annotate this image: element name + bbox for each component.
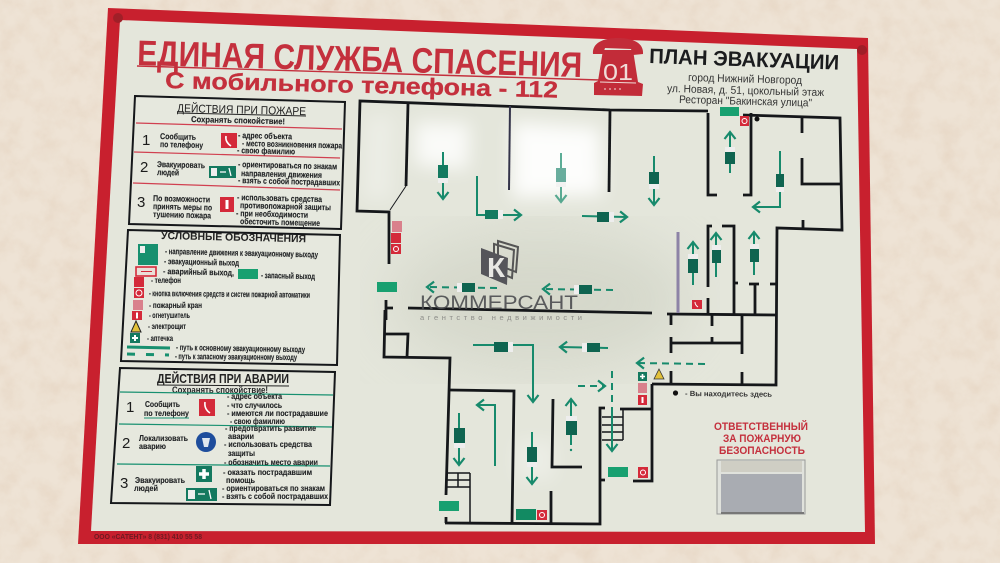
arrow: route 8	[473, 342, 533, 402]
row dividers	[133, 123, 342, 190]
legend: direction sign: - направление движения к эвакуационному выходу	[165, 246, 318, 259]
fire step 1: 1	[142, 132, 150, 149]
glare on the plate	[362, 115, 603, 480]
accident step 1: по телефону	[144, 408, 189, 418]
sign board	[78, 8, 875, 544]
fire safety responsible	[714, 420, 808, 457]
legend: alarm button	[134, 288, 310, 300]
legend: direction sign	[138, 244, 318, 265]
arrow: route 10	[566, 399, 577, 451]
plan heading	[649, 45, 840, 109]
plan heading: Ресторан "Бакинская улица"	[679, 94, 812, 109]
panel: legend	[121, 230, 340, 365]
accident step 2: аварии	[228, 431, 254, 441]
watermark name: КОММЕРСАНТ	[420, 293, 578, 314]
fire heading: Сохранять спокойствие!	[191, 114, 285, 126]
plan heading: ПЛАН ЭВАКУАЦИИ	[649, 45, 840, 75]
accident step 3: - оказать пострадавшим	[223, 467, 312, 477]
legend: extinguisher: - огнетушитель	[149, 310, 190, 320]
arrow: route 19	[725, 132, 735, 173]
warning triangle	[654, 369, 664, 379]
accident step 2: Локализовать	[139, 433, 188, 443]
legend: emergency and spare exit	[136, 266, 316, 281]
watermark caption: агентство недвижимости	[420, 313, 582, 322]
arrow: route 18	[750, 232, 759, 275]
floor plan walls	[357, 101, 842, 524]
arrow: route 2	[477, 176, 521, 219]
accident step 3: Эвакуировать	[135, 475, 185, 485]
accident step 1: - имеются ли пострадавшие	[227, 408, 328, 418]
subtitle: С мобильного телефона - 112	[165, 67, 558, 103]
fire heading: ДЕЙСТВИЯ ПРИ ПОЖАРЕ	[177, 102, 306, 118]
title: ЕДИНАЯ СЛУЖБА СПАСЕНИЯ	[137, 33, 583, 85]
watermark logo	[481, 241, 518, 285]
fire step 3: обесточить помещение	[240, 216, 320, 228]
legend: main route: - путь к основному эвакуационному выходу	[176, 342, 305, 354]
corner pins	[113, 13, 867, 55]
fire step 3: принять меры по	[153, 201, 212, 212]
panel: fire actions	[129, 96, 345, 229]
fire step 2: 2	[140, 159, 148, 176]
arrow: route 9	[560, 343, 608, 352]
plate shading	[390, 230, 690, 370]
black dot top	[754, 116, 760, 122]
accident step 2: аварию	[139, 441, 166, 451]
fire step 3: 3	[137, 194, 145, 211]
legend: first aid: - аптечка	[147, 333, 173, 343]
legend heading: УСЛОВНЫЕ ОБОЗНАЧЕНИЯ	[161, 230, 306, 245]
accident step 3: помощь	[226, 475, 255, 485]
name card holder	[717, 460, 805, 514]
telephone	[692, 300, 702, 309]
evacuation routes	[427, 132, 784, 484]
accident step 2: - предотвратить развитие	[225, 423, 316, 433]
fire step 1: - адрес объекта	[238, 130, 292, 141]
watermark logo: К	[487, 252, 506, 283]
alarm button bottom right	[638, 467, 648, 478]
fire step 2: - взять с собой пострадавших	[238, 175, 340, 187]
accident heading: ДЕЙСТВИЯ ПРИ АВАРИИ	[157, 371, 289, 386]
spare exit sign bottom left	[439, 501, 459, 511]
accident step 3	[120, 466, 328, 501]
legend: hydrant: - пожарный кран	[149, 300, 202, 310]
accident step 1: - что случилось	[227, 400, 282, 410]
fire safety responsible: ЗА ПОЖАРНУЮ	[723, 433, 801, 445]
arrow: route 13	[477, 405, 495, 466]
arrow: route 7	[543, 285, 613, 294]
fire step 2: направления движения	[241, 168, 322, 180]
arrow: route 5	[649, 156, 659, 205]
fire step 1: - свою фамилию	[237, 145, 295, 156]
panel: accident actions	[111, 368, 335, 505]
footer contact: ООО «САТЕНТ» 8 (831) 410 55 58	[94, 534, 202, 541]
fire step 3: тушению пожара	[153, 209, 211, 220]
legend: spare route: - путь к запасному эвакуационному выходу	[175, 351, 297, 362]
fire step 1: по телефону	[160, 139, 203, 150]
fire safety responsible: БЕЗОПАСНОСТЬ	[719, 445, 805, 457]
legend: first aid	[130, 333, 173, 343]
alarm button top	[740, 116, 749, 126]
accident step 1: - свою фамилию	[230, 416, 285, 426]
fire step 3: - использовать средства	[237, 192, 322, 204]
fire heading	[177, 102, 306, 126]
accident step 2	[122, 423, 318, 467]
accident heading	[157, 371, 289, 396]
fire step 1	[142, 130, 342, 156]
accident step 2: защиты	[228, 448, 255, 458]
fire step 1: - место возникновения пожара	[242, 138, 342, 150]
accident step 1: 1	[126, 399, 134, 416]
exit sign bottom centre	[516, 509, 536, 520]
accident step 2: - обозначить место аварии	[224, 457, 318, 467]
arrow: route 12	[637, 363, 705, 364]
arrow: route 15	[527, 432, 537, 484]
arrow: route 6	[427, 283, 497, 292]
arrow: route 11	[578, 371, 612, 451]
legend: alarm button: - кнопка включения средств и систем пожарной автоматики	[149, 288, 310, 300]
accident step 1: Сообщить	[145, 399, 180, 409]
legend: extinguisher	[132, 310, 190, 320]
arrow: route 14	[454, 413, 465, 465]
you are here note: - Вы находитесь здесь	[685, 389, 772, 399]
hydrant, extinguisher and button left	[391, 221, 402, 254]
first aid, hydrant, extinguisher	[638, 372, 647, 405]
legend: emergency and spare exit: - запасный выход	[261, 270, 316, 281]
arrow: route 1	[438, 152, 448, 199]
exit sign top	[720, 107, 739, 116]
legend: exit: - эвакуационный выход	[164, 256, 240, 268]
arrow: route 20	[753, 151, 784, 207]
fire step 3: - при необходимости	[236, 208, 308, 220]
fire step 2: Эвакуировать	[157, 159, 205, 170]
arrow: route 16	[688, 242, 698, 285]
fire step 2: - ориентироваться по знакам	[238, 159, 337, 171]
legend: phone	[134, 275, 181, 287]
accident step 3: людей	[134, 483, 158, 493]
icon: telephone 01: 01	[603, 59, 633, 85]
alarm button bottom centre	[537, 510, 547, 520]
exit sign bottom right	[608, 467, 628, 477]
purple partition	[676, 232, 680, 313]
accident step 3: 3	[120, 475, 128, 492]
icon: telephone 01	[593, 38, 643, 96]
fire step 2: людей	[157, 167, 179, 178]
accident step 3: - ориентироваться по знакам	[222, 483, 325, 493]
fire step 3: По возможности	[153, 193, 210, 204]
accident step 3: - взять с собой пострадавших	[222, 491, 328, 501]
accident step 2: - использовать средства	[224, 439, 312, 449]
fire safety responsible: ОТВЕТСТВЕННЫЙ	[714, 420, 808, 433]
legend: electrical panel: - электрощит	[148, 321, 186, 331]
accident step 1	[126, 391, 328, 426]
fire step 1: Сообщить	[160, 131, 196, 142]
accident step 2: 2	[122, 435, 130, 452]
arrow: route 3	[556, 153, 566, 202]
legend: electrical panel	[131, 321, 186, 332]
plan heading: ул. Новая, д. 51, цокольный этаж	[667, 83, 825, 99]
fire step 3	[137, 192, 331, 228]
legend: hydrant	[133, 300, 202, 310]
legend: phone: - телефон	[151, 275, 181, 285]
exit signs and equipment on plan	[377, 107, 760, 520]
exit sign left	[377, 282, 397, 292]
fire step 3: противопожарной защиты	[240, 200, 331, 212]
arrow: route 4	[582, 212, 627, 222]
fire step 2	[140, 159, 340, 187]
row dividers	[117, 392, 333, 466]
accident step 1: - адрес объекта	[227, 391, 282, 401]
legend: emergency and spare exit: - аварийный выход,	[163, 266, 234, 278]
accident heading: Сохранять спокойствие!	[172, 385, 268, 396]
plan heading: город Нижний Новгород	[688, 72, 803, 87]
arrow: route 17	[712, 233, 721, 277]
